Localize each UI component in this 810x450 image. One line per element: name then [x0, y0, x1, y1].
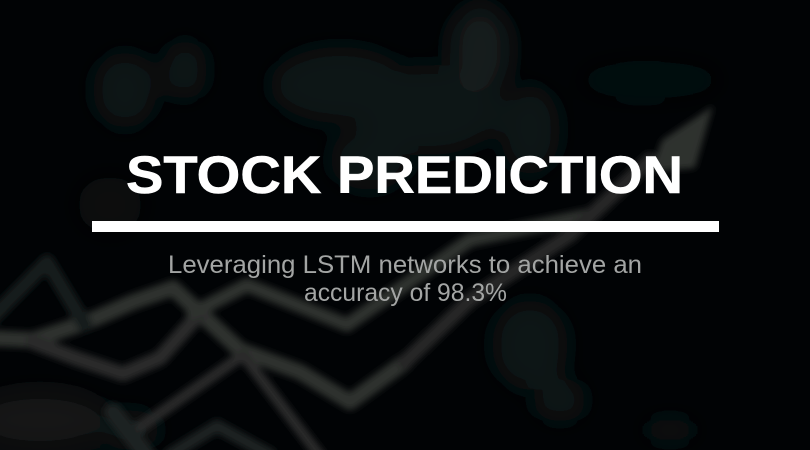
subtitle line 1: Leveraging LSTM networks to achieve an — [168, 251, 642, 279]
background: stock line chart with arrow — [0, 160, 650, 450]
background: arrow head — [650, 106, 713, 172]
title: STOCK PREDICTION — [126, 146, 683, 205]
divider bar — [92, 221, 719, 232]
subtitle — [168, 251, 642, 307]
subtitle line 2: accuracy of 98.3% — [304, 279, 507, 307]
